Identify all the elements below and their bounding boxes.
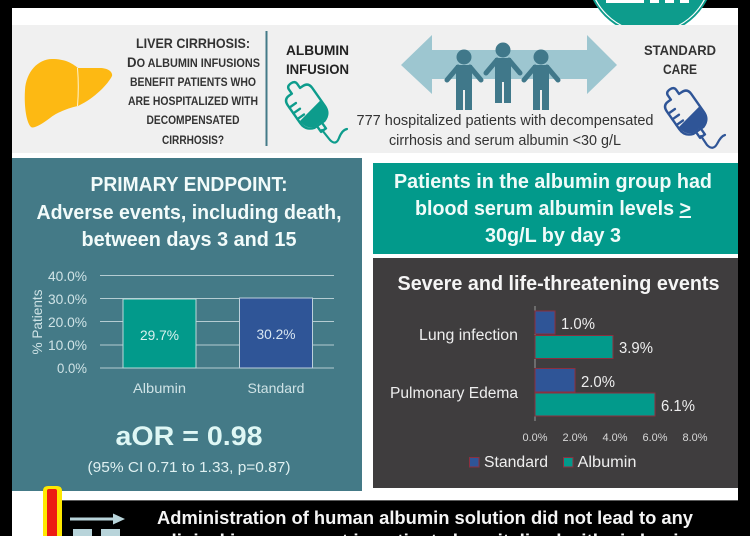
legend: Standard	[484, 454, 548, 471]
question text: CIRRHOSIS?	[162, 135, 224, 147]
bar chart: primary endpoint: % Patients	[29, 290, 45, 354]
panel: serum albumin result: 30g/L by day 3	[485, 225, 621, 247]
bar: standard: 30.2%	[256, 326, 296, 342]
standard care label: STANDARD	[644, 42, 716, 58]
icon: patients	[447, 42, 558, 110]
albumin infusion label: INFUSION	[286, 61, 349, 77]
divider	[266, 31, 268, 146]
adjusted odds ratio: aOR = 0.98	[116, 421, 262, 451]
panel: conclusion	[62, 500, 738, 536]
bar: standard	[240, 298, 312, 368]
confidence interval: (95% CI 0.71 to 1.33, p=0.87)	[88, 459, 290, 476]
bar chart: severe events: Lung infection	[419, 327, 518, 344]
patient three	[524, 50, 558, 110]
icon: liver	[25, 59, 112, 127]
bar chart: primary endpoint: 20.0%	[48, 314, 87, 330]
bar chart: primary endpoint	[29, 268, 334, 396]
legend: Albumin	[578, 454, 636, 471]
population text	[356, 112, 654, 149]
events heading: Severe and life-threatening events	[398, 273, 720, 295]
bar chart: severe events: 3.9%	[619, 340, 653, 357]
bar chart: severe events	[390, 306, 708, 471]
bar: albumin: 29.7%	[140, 327, 179, 343]
bar chart: primary endpoint: 30.0%	[48, 291, 87, 307]
question text: DO ALBUMIN INFUSIONS	[127, 54, 260, 70]
bar chart: severe events: 2.0%	[562, 432, 588, 444]
bar chart: severe events: 4.0%	[602, 432, 628, 444]
question text: LIVER CIRRHOSIS:	[136, 35, 250, 51]
panel: serum albumin result: Patients in the albumin group had	[394, 171, 712, 193]
panel: study design header	[12, 25, 738, 153]
endpoint heading: between days 3 and 15	[82, 229, 296, 251]
panel: severe and life-threatening events	[373, 258, 738, 488]
bar chart: primary endpoint: 0.0%	[57, 360, 87, 376]
bar chart: primary endpoint: 10.0%	[48, 337, 87, 353]
question text	[127, 35, 260, 147]
icon: thermometer alert	[43, 486, 62, 536]
panel: primary endpoint	[12, 158, 362, 491]
endpoint heading: PRIMARY ENDPOINT:	[90, 174, 288, 196]
endpoint heading: Adverse events, including death,	[36, 202, 342, 224]
icon: albumin IV bag	[279, 75, 347, 143]
bar chart: primary endpoint: Standard	[248, 380, 304, 396]
logo badge	[586, 0, 714, 35]
bar chart: severe events: 6.0%	[642, 432, 668, 444]
icon: two-way arrow	[401, 35, 617, 94]
bar chart: severe events: 1.0%	[561, 316, 595, 333]
bar chart: primary endpoint: 40.0%	[48, 268, 87, 284]
panel: serum albumin result: blood serum albumin levels >	[415, 198, 691, 220]
legend	[470, 454, 636, 471]
bar chart: severe events: Pulmonary Edema	[390, 385, 518, 402]
standard care label: CARE	[663, 61, 697, 77]
bar chart: severe events: 0.0%	[522, 432, 548, 444]
bar chart: primary endpoint: Albumin	[133, 380, 186, 396]
question text: DECOMPENSATED	[146, 115, 240, 127]
question text: ARE HOSPITALIZED WITH	[128, 96, 258, 108]
bar chart: severe events: 8.0%	[682, 432, 708, 444]
albumin infusion label: ALBUMIN	[286, 42, 349, 58]
conclusion text: Administration of human albumin solution did not lead to any	[157, 507, 694, 528]
standard care label	[644, 42, 716, 77]
bar chart: severe events: 6.1%	[661, 398, 695, 415]
patient one	[447, 50, 481, 110]
question text: BENEFIT PATIENTS WHO	[130, 77, 256, 89]
bar chart: severe events: 2.0%	[581, 374, 615, 391]
population text: 777 hospitalized patients with decompensated	[356, 112, 654, 129]
bar: albumin	[123, 299, 196, 368]
albumin infusion label	[286, 42, 349, 77]
patient two	[486, 42, 520, 103]
icon: standard care IV bag	[658, 81, 725, 148]
population text: cirrhosis and serum albumin <30 g/L	[389, 132, 621, 149]
panel: serum albumin result	[373, 163, 738, 254]
icon: practice arrow and boxes	[70, 514, 125, 536]
endpoint heading	[36, 174, 342, 251]
